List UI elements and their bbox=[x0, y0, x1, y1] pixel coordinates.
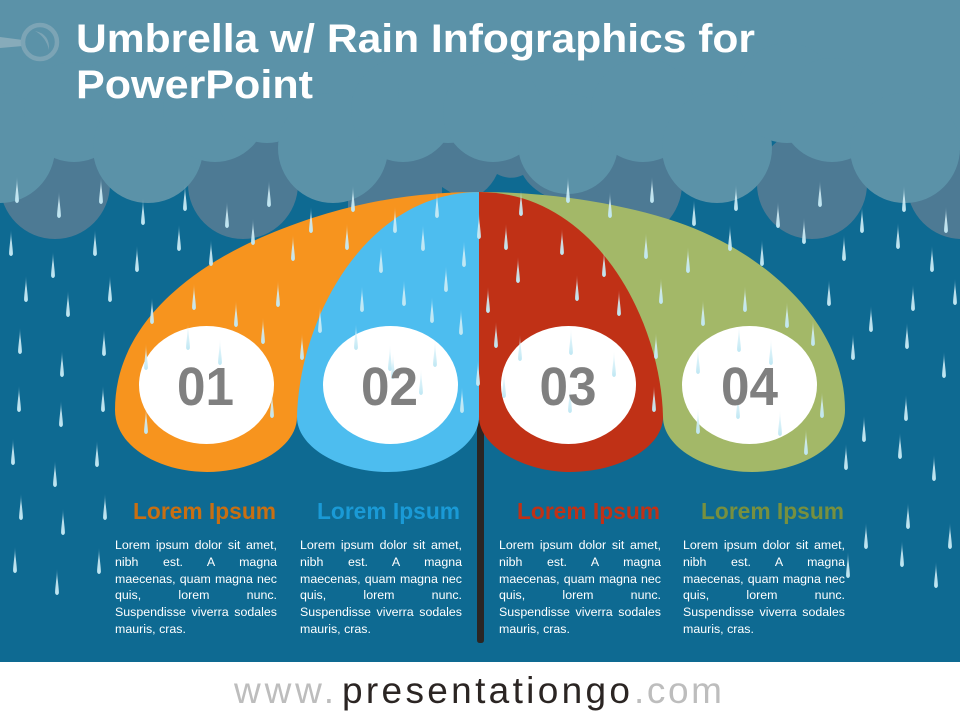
umbrella panel 2: blue bbox=[297, 192, 480, 472]
text block 4: mauris, cras. bbox=[683, 622, 754, 636]
column headings: Lorem Ipsum bbox=[317, 498, 460, 524]
text block 1: mauris, cras. bbox=[115, 622, 186, 636]
umbrella handle bbox=[477, 420, 484, 643]
text block 4: maecenas, quam magna nec bbox=[683, 572, 845, 586]
text block 4: Lorem ipsum dolor sit amet, bbox=[683, 538, 845, 552]
text block 1: nibh est. A magna bbox=[115, 555, 277, 569]
numbers 01 to 04: 03 bbox=[540, 357, 596, 417]
numbers 01 to 04: 04 bbox=[721, 357, 778, 417]
text block 1: Suspendisse viverra sodales bbox=[115, 605, 277, 619]
numbers 01 to 04 bbox=[177, 357, 778, 417]
text block 3: maecenas, quam magna nec bbox=[499, 572, 661, 586]
title: Umbrella w/ Rain Infographics for bbox=[76, 17, 755, 61]
text block 3: mauris, cras. bbox=[499, 622, 570, 636]
clouds: front layer bbox=[0, 0, 960, 203]
column headings bbox=[133, 498, 844, 524]
icon: magnifier watermark bbox=[0, 25, 57, 59]
umbrella panel 4: green bbox=[479, 192, 845, 472]
text block 4 bbox=[683, 538, 846, 636]
text block 2: maecenas, quam magna nec bbox=[300, 572, 462, 586]
numbers 01 to 04: 02 bbox=[361, 357, 418, 417]
text block 4: Suspendisse viverra sodales bbox=[683, 605, 845, 619]
text block 2: Lorem ipsum dolor sit amet, bbox=[300, 538, 462, 552]
column headings: Lorem Ipsum bbox=[701, 498, 844, 524]
clouds: back layer bbox=[0, 100, 960, 239]
text block 2: nibh est. A magna bbox=[300, 555, 462, 569]
text block 3: nibh est. A magna bbox=[499, 555, 661, 569]
umbrella panel 1: orange bbox=[115, 192, 480, 472]
title bbox=[76, 17, 755, 107]
text block 4: nibh est. A magna bbox=[683, 555, 845, 569]
text block 1: quis, lorem nunc. bbox=[115, 588, 277, 602]
numbers 01 to 04: 01 bbox=[177, 357, 234, 417]
text block 3: Suspendisse viverra sodales bbox=[499, 605, 661, 619]
footer url: .com bbox=[634, 670, 722, 711]
white ovals bbox=[139, 326, 817, 444]
footer url bbox=[233, 670, 722, 711]
rain drops bbox=[9, 177, 957, 595]
umbrella panel 3: red bbox=[479, 192, 663, 472]
text block 3: quis, lorem nunc. bbox=[499, 588, 661, 602]
title: PowerPoint bbox=[76, 63, 313, 107]
text block 3: Lorem ipsum dolor sit amet, bbox=[499, 538, 661, 552]
text block 1 bbox=[115, 538, 278, 636]
text block 1: Lorem ipsum dolor sit amet, bbox=[115, 538, 277, 552]
column headings: Lorem Ipsum bbox=[517, 498, 660, 524]
text block 3 bbox=[499, 538, 662, 636]
text block 2: Suspendisse viverra sodales bbox=[300, 605, 462, 619]
text block 2: mauris, cras. bbox=[300, 622, 371, 636]
text block 4: quis, lorem nunc. bbox=[683, 588, 845, 602]
text block 2 bbox=[300, 538, 462, 636]
footer url: presentationgo bbox=[342, 670, 630, 711]
text block 1: maecenas, quam magna nec bbox=[115, 572, 277, 586]
column headings: Lorem Ipsum bbox=[133, 498, 276, 524]
text block 2: quis, lorem nunc. bbox=[300, 588, 462, 602]
footer url: www. bbox=[233, 670, 334, 711]
footer band bbox=[0, 662, 960, 720]
